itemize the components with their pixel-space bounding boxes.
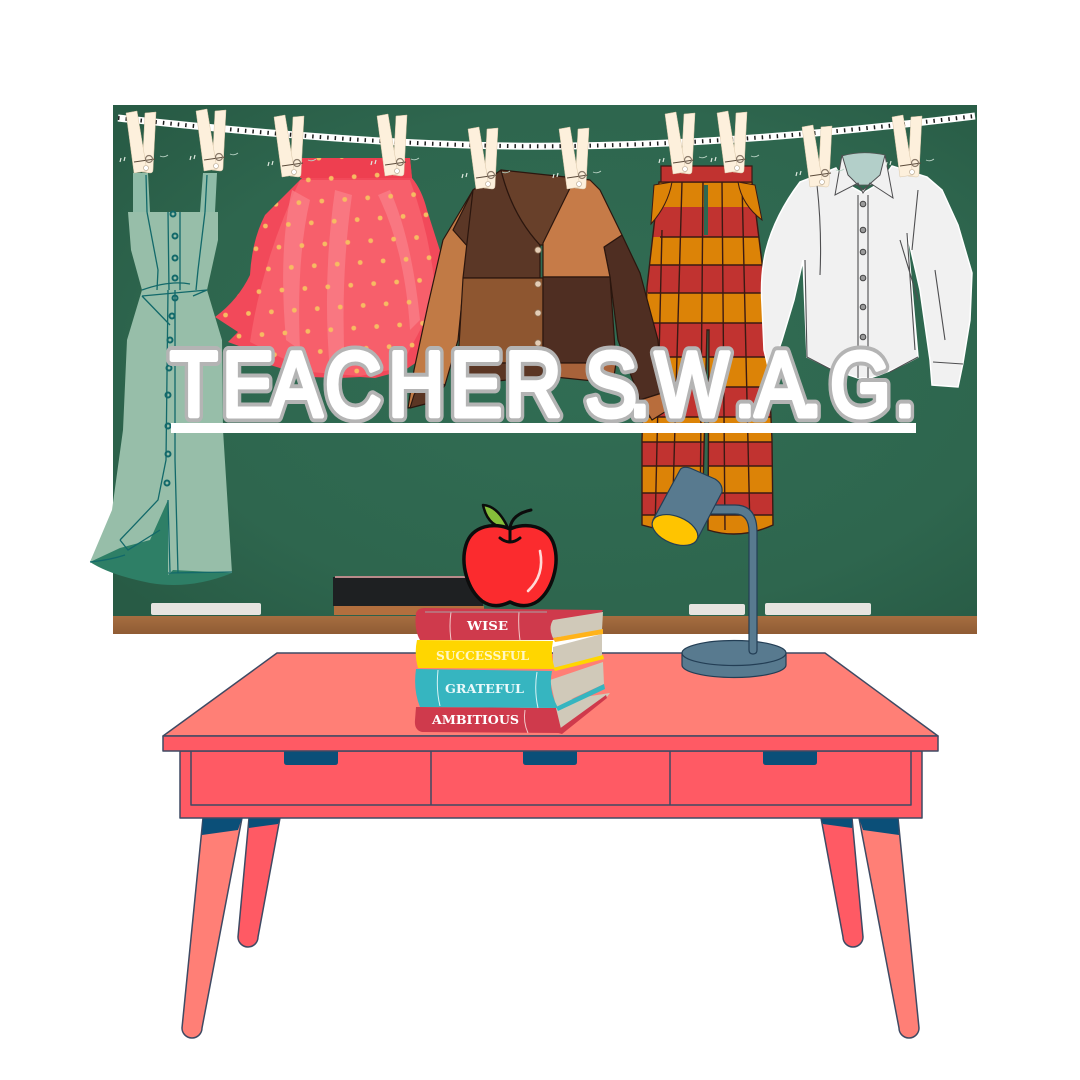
apple stem [500,510,531,542]
apple leaf [483,505,508,528]
chalk stick left [151,603,261,615]
apple body [464,526,556,606]
desk lamp [648,467,786,677]
clothespins [120,109,934,189]
lamp base [682,653,786,677]
dress buttons [170,212,176,216]
book: successful: SUCCESSFUL [436,648,529,663]
apple [464,505,556,606]
white button-up shirt [762,153,972,387]
desk body [180,751,922,818]
back left leg [238,818,280,947]
book: ambitious: AMBITIOUS [431,712,519,727]
infographic scene [90,105,977,1039]
drawer handles [284,751,817,765]
book: ambitious [415,693,610,734]
chalkboard [113,105,977,634]
chalkboard eraser [333,576,484,615]
book: successful [416,634,604,671]
title: TEACHER S.W.A.G. [170,334,916,436]
desktop front edge [163,736,938,751]
lamp shade [653,467,722,538]
green sundress [90,173,232,585]
desk drawers [191,751,911,805]
book: grateful: GRATEFUL [445,681,524,696]
book: grateful [415,662,605,711]
shirt collar [835,155,893,198]
title: TEACHER S.W.A.G. [170,334,916,436]
chalk stick right [765,603,871,615]
plaid trousers [641,165,774,535]
book: wise: WISE [466,618,508,633]
shirt buttons [860,201,866,207]
lamp bulb opening [648,508,702,552]
front left leg [182,818,242,1038]
front right leg [859,818,919,1038]
title underline [171,423,916,433]
apple highlight [528,551,541,591]
stack of books [415,608,610,734]
brown patchwork cardigan [408,170,668,420]
book: wise [416,608,603,642]
cardigan buttons [535,247,541,253]
chalk stick middle [689,604,745,615]
lamp arm [710,505,757,654]
desktop surface [163,653,938,736]
clothesline rope [118,116,975,146]
red polka dot skirt [215,158,446,378]
desk [163,653,938,1038]
back right leg [821,818,863,947]
